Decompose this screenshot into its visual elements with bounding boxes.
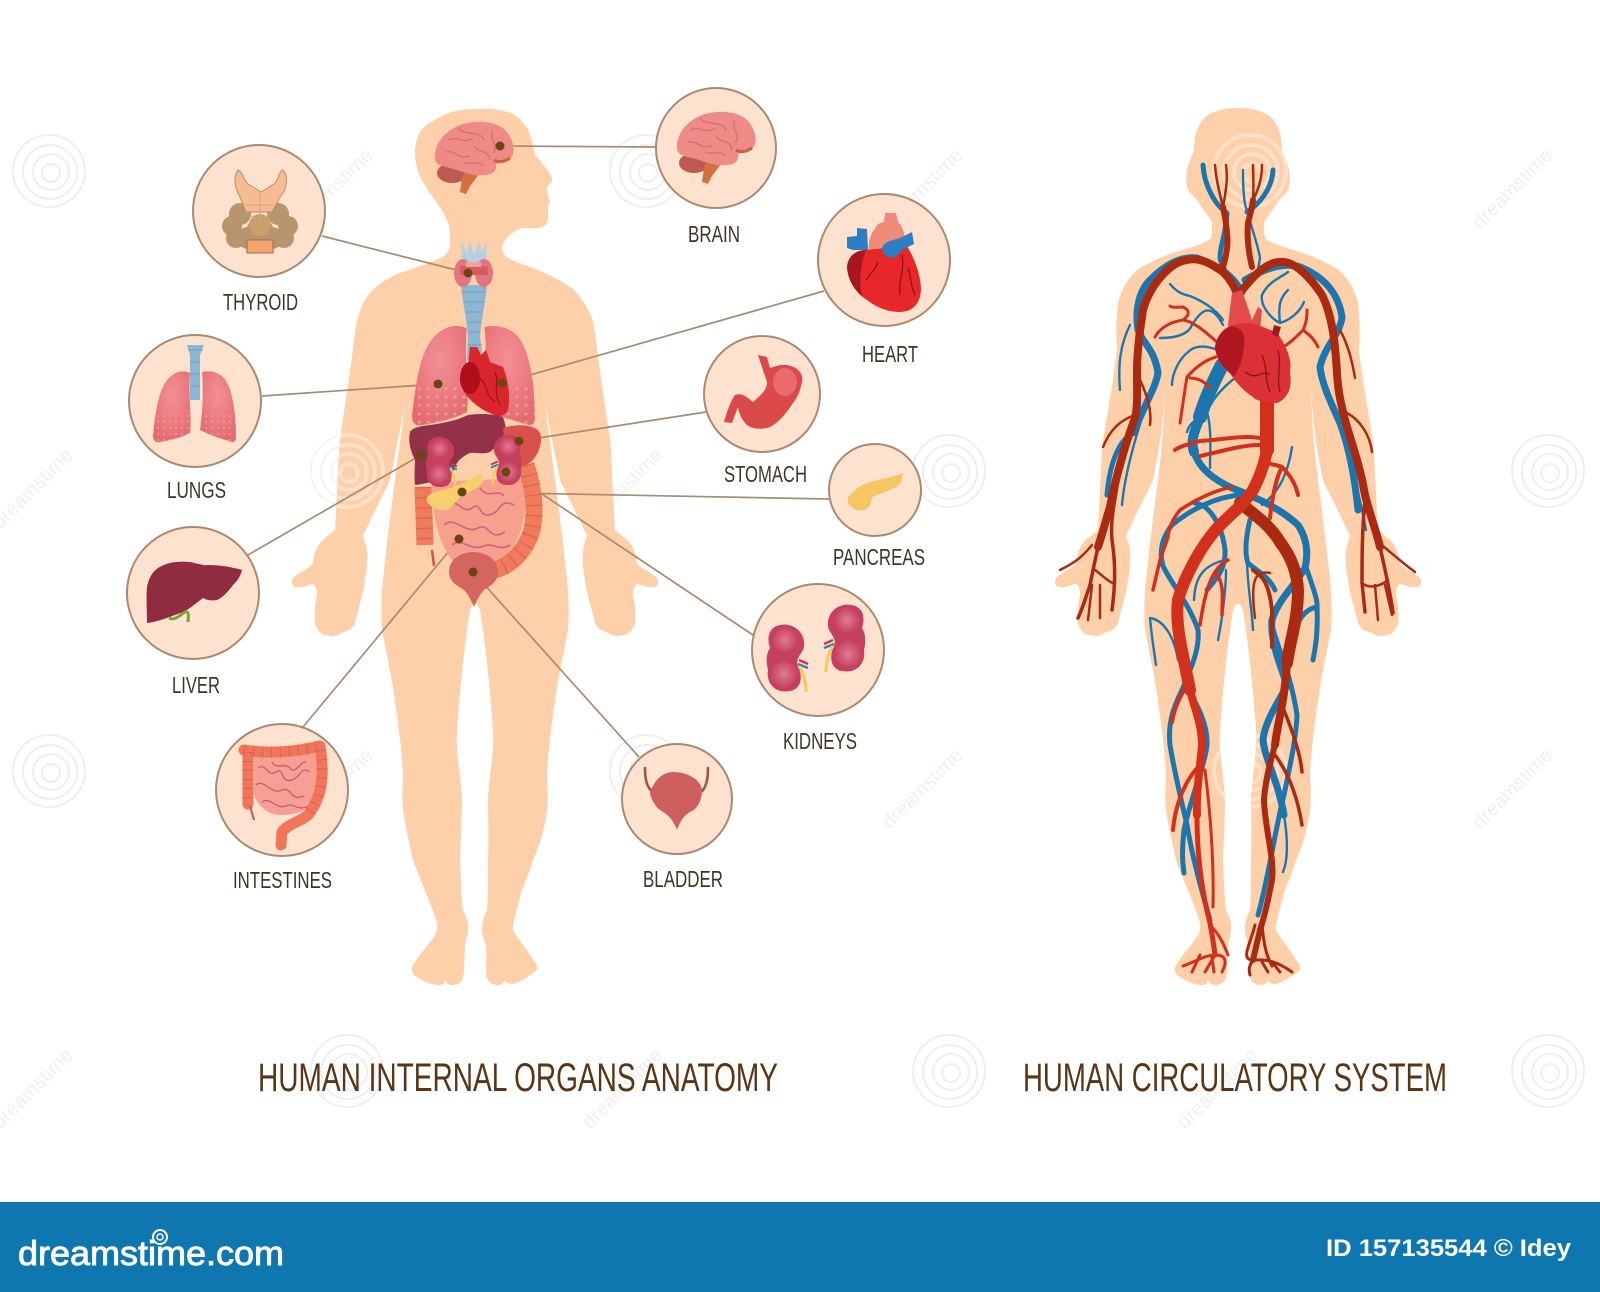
callout: thyroid xyxy=(193,145,325,315)
veins: blue network xyxy=(1107,165,1366,920)
pin markers xyxy=(416,142,524,576)
watermark text: dreamstime xyxy=(578,1044,667,1134)
veins: left pelvis and legs xyxy=(1161,495,1240,920)
footer band xyxy=(0,1202,1600,1292)
arteries: bright red network xyxy=(1153,306,1318,972)
watermark text: dreamstime xyxy=(288,744,377,834)
watermark swirl over the arm xyxy=(311,435,383,507)
arteries: dark red network xyxy=(1060,165,1415,975)
organ: kidneys xyxy=(426,435,522,488)
callout: pancreas xyxy=(829,444,925,570)
callout: kidneys xyxy=(752,584,884,754)
organ: liver xyxy=(409,414,506,485)
callout: thyroid: THYROID xyxy=(223,289,298,315)
callout: kidneys: KIDNEYS xyxy=(783,728,857,754)
footer credit: ID 157135544 © Idey xyxy=(1326,1235,1572,1262)
body silhouette: internal organs figure xyxy=(292,109,658,985)
body silhouette: circulatory figure xyxy=(1055,108,1421,985)
organ: stomach xyxy=(503,425,541,466)
watermark swirls xyxy=(13,135,1584,1107)
organ: brain xyxy=(435,122,514,194)
callout: lungs: LUNGS xyxy=(167,477,226,503)
organ: bladder xyxy=(449,552,498,607)
circulatory system vessels xyxy=(1060,165,1415,975)
callout: heart xyxy=(818,194,950,367)
watermark text: dreamstime xyxy=(1468,744,1557,834)
organ: heart xyxy=(460,347,509,416)
callout: stomach: STOMACH xyxy=(724,461,807,487)
organs inside the body xyxy=(409,122,541,607)
callout: brain: BRAIN xyxy=(688,221,740,247)
footer logo: dreamstime.com xyxy=(18,1235,284,1273)
callout: intestines xyxy=(216,724,348,893)
callout: lungs xyxy=(129,335,261,503)
callout: bladder: BLADDER xyxy=(643,866,723,892)
callout: liver xyxy=(127,527,259,698)
callout: heart: HEART xyxy=(862,341,918,367)
connector lines xyxy=(248,146,829,757)
organ: thyroid xyxy=(454,259,493,287)
watermark text: dreamstime xyxy=(878,744,967,834)
organ: trachea xyxy=(461,241,487,360)
watermark text: dreamstime xyxy=(288,144,377,234)
callout: intestines: INTESTINES xyxy=(233,867,332,893)
circulatory heart xyxy=(1215,290,1291,403)
watermark text: dreamstime xyxy=(1173,1044,1262,1134)
watermark swirls over the circulatory figure xyxy=(1214,135,1286,807)
organ: intestines xyxy=(423,465,534,570)
watermark text: dreamstime xyxy=(878,144,967,234)
callout: brain xyxy=(656,88,776,247)
title: left figure: HUMAN INTERNAL ORGANS ANATOMY xyxy=(258,1056,778,1100)
callout: bladder xyxy=(622,744,732,892)
watermark text: dreamstime xyxy=(1468,144,1557,234)
callout: pancreas: PANCREAS xyxy=(833,544,925,570)
organ: pancreas xyxy=(427,473,483,510)
watermark text xyxy=(0,144,1557,1134)
watermark text: dreamstime xyxy=(578,444,667,534)
organ: lungs xyxy=(412,326,535,425)
callout: liver: LIVER xyxy=(172,672,220,698)
callout: stomach xyxy=(704,336,820,487)
